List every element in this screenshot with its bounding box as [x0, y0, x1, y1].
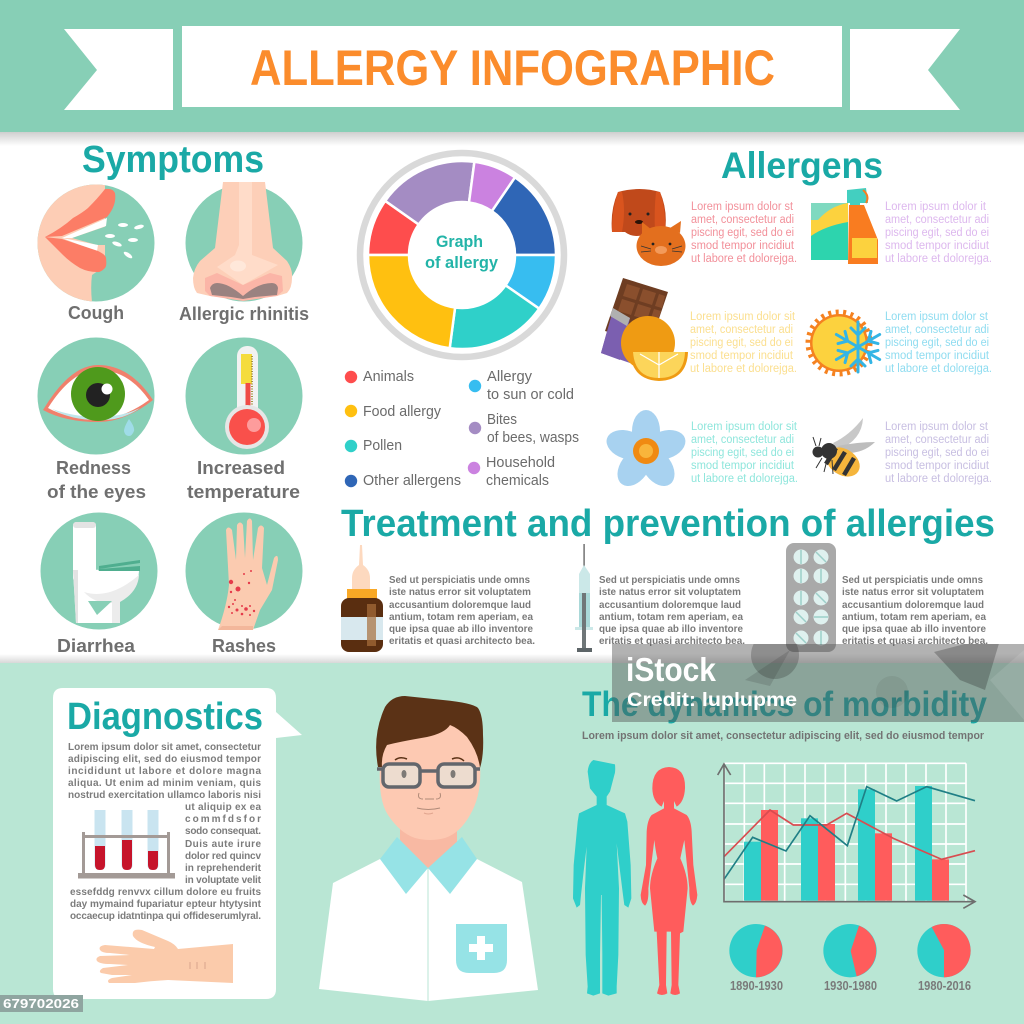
donut chart: graph of allergy [360, 153, 564, 357]
chart center label: Graph [436, 233, 483, 251]
text: animals: piscing egit, sed do ei [691, 227, 794, 239]
diagnostics paragraph: incididunt ut labore et dolore magna [68, 766, 261, 777]
text: sun or cold: smod tempor incidiut [885, 350, 990, 362]
heading: symptoms: Symptoms [82, 139, 264, 181]
text: treatment 2: accusantium doloremque laud [599, 599, 741, 611]
legend: Pollen [363, 438, 402, 454]
diagnostics paragraph: essefddg renvvx cillum dolore eu fruits [70, 887, 261, 898]
watermark overlay: Credit: luplupme [627, 690, 797, 711]
label: increased temperature: Increased [197, 457, 285, 478]
icon: flower [603, 410, 689, 492]
text: treatment 2: iste natus error sit voluptatem [599, 586, 741, 598]
face [380, 720, 480, 840]
text: pollen: Lorem ipsum dolor sit [691, 421, 798, 433]
diagnostics paragraph: in voluptate velit [185, 875, 262, 886]
text: bites: amet, consectetur adi [885, 434, 989, 446]
text: treatment 3: que ipsa quae ab illo inventore [842, 623, 986, 635]
text: sun or cold: Lorem ipsum dolor st [885, 311, 989, 323]
chart: morbidity bars and lines [718, 763, 975, 908]
chart center label [425, 233, 499, 272]
label: diarrhea: Diarrhea [57, 635, 136, 656]
banner [182, 26, 842, 107]
diagnostics paragraph: ut aliquip ex ea [185, 802, 261, 813]
legend: to sun or cold [487, 387, 574, 403]
icon: nose [186, 182, 302, 302]
text: food allergy: smod tempor incidiut [690, 350, 794, 362]
legend: Household [486, 455, 555, 471]
heading: the dynamics of morbidity: The dynamics of morbidity [582, 685, 987, 724]
icon: eye [38, 338, 154, 454]
glasses [377, 764, 480, 787]
icon: household chemicals [811, 188, 878, 264]
text: food allergy: amet, consectetur adi [690, 324, 793, 336]
icon: syringe [575, 544, 593, 652]
text: treatment 1: Sed ut perspiciatis unde omns [389, 574, 530, 586]
legend: Allergy [487, 369, 533, 385]
text: bites: piscing egit, sed do ei [885, 447, 989, 459]
hair [376, 696, 483, 768]
text: household chemicals: Lorem ipsum dolor it [885, 201, 987, 213]
text: treatment 1 [389, 574, 535, 647]
text: food allergy: ut labore et dolorejga. [690, 363, 797, 375]
text: sun or cold: amet, consectetur adi [885, 324, 989, 336]
label: redness of the eyes: Redness [56, 457, 131, 478]
text: treatment 3: Sed ut perspiciatis unde omns [842, 574, 983, 586]
icon: chocolate and orange [601, 278, 688, 381]
pie labels: 1980-2016 [918, 979, 971, 993]
text: treatment 3 [842, 574, 988, 647]
text: treatment 2: Sed ut perspiciatis unde omns [599, 574, 740, 586]
pie charts by period [729, 924, 971, 977]
legend: Bites [487, 412, 517, 428]
text: food allergy: Lorem ipsum dolor sit [690, 311, 796, 323]
text: treatment 1: eritatis et quasi architecto bea. [389, 635, 535, 647]
text: household chemicals: piscing egit, sed do ei [885, 227, 989, 239]
icon: arm with skin test [96, 930, 233, 983]
text: pollen: piscing egit, sed do ei [691, 447, 794, 459]
collar [380, 837, 428, 894]
text: food allergy: piscing egit, sed do ei [690, 337, 793, 349]
diagnostics paragraph: day mymaind fupariatur epteur htytysint [70, 899, 262, 910]
nose and mouth [417, 793, 440, 810]
image id tag [0, 995, 83, 1012]
legend: of bees, wasps [487, 430, 579, 446]
text: bites: Lorem ipsum dolor st [885, 421, 989, 433]
diagnostics paragraph: adipiscing elit, sed do eiusmod tempor [68, 754, 261, 765]
text: household chemicals [885, 201, 992, 265]
heading: treatment and prevention: Treatment and prevention of allergies [341, 503, 995, 545]
text: animals: smod tempor incidiut [691, 240, 795, 252]
text: animals: Lorem ipsum dolor st [691, 201, 794, 213]
text: treatment 2: antium, totam rem aperiam, ea [599, 611, 743, 623]
icon: toilet [40, 512, 158, 630]
label: increased temperature: temperature [187, 481, 300, 502]
diagnostics paragraph: occaecup idatntinpa qui offideserumlyral. [70, 911, 261, 922]
diagnostics paragraph: c o m m f d s f o r [185, 814, 261, 825]
icon: hand with rash [186, 512, 302, 630]
text: treatment 2: eritatis et quasi architecto bea. [599, 635, 745, 647]
label: rashes: Rashes [212, 635, 276, 656]
text: household chemicals: amet, consectetur adi [885, 214, 989, 226]
text: household chemicals: ut labore et dolorejga. [885, 253, 992, 265]
icon: thermometer [186, 338, 302, 454]
watermark text: iStock [626, 651, 717, 688]
watermark overlay [612, 644, 1024, 722]
text: treatment 3: eritatis et quasi architecto bea. [842, 635, 988, 647]
text: animals: ut labore et dolorejga. [691, 253, 797, 265]
doctor illustration [319, 696, 538, 1001]
text: treatment 3: antium, totam rem aperiam, ea [842, 611, 986, 623]
label: redness of the eyes: of the eyes [47, 481, 146, 502]
subheading: Lorem ipsum dolor sit amet, consectetur adipiscing elit, sed do eiusmod tempor [582, 730, 985, 742]
legend: chemicals [486, 473, 549, 489]
icon: dropper bottle [341, 545, 383, 652]
diagnostics paragraph: in reprehenderit [185, 863, 262, 874]
pie labels [730, 979, 971, 993]
text: treatment 1: antium, totam rem aperiam, ea [389, 611, 533, 623]
ribbon right [850, 29, 960, 110]
legend: Other allergens [363, 473, 461, 489]
pie labels: 1890-1930 [730, 979, 783, 993]
coat [319, 859, 538, 1001]
pocket [456, 924, 507, 973]
icon: bee [812, 418, 875, 483]
icon: pill blister [786, 543, 836, 652]
diagnostics paragraph: sodo consequat. [185, 826, 261, 837]
diagnostics paragraph: Lorem ipsum dolor sit amet, consectetur [68, 742, 261, 753]
icon: sun and snowflake [808, 312, 883, 374]
text: treatment 1: accusantium doloremque laud [389, 599, 531, 611]
chart center label: of allergy [425, 254, 499, 272]
text: pollen [691, 421, 798, 485]
text: bites: smod tempor incidiut [885, 460, 990, 472]
text: sun or cold: ut labore et dolorejga. [885, 363, 992, 375]
text: sun or cold [885, 311, 992, 375]
diagnostics paragraph [68, 742, 262, 922]
text: pollen: amet, consectetur adi [691, 434, 794, 446]
diagnostics paragraph: aliqua. Ut enim ad minim veniam, quis [68, 778, 261, 789]
text: treatment 2 [599, 574, 745, 647]
text: animals [691, 201, 797, 265]
text: household chemicals: smod tempor incidiut [885, 240, 990, 252]
text: treatment 3: iste natus error sit voluptatem [842, 586, 984, 598]
text: sun or cold: piscing egit, sed do ei [885, 337, 989, 349]
silhouettes: man and woman [573, 760, 697, 996]
legend: Animals [363, 369, 414, 385]
label: redness of the eyes [47, 457, 146, 502]
diagnostics paragraph: nostrud exercitation ullamco laboris nisi [68, 790, 261, 801]
panel: diagnostics speech bubble [53, 688, 302, 999]
icon: dog and cat [612, 189, 686, 266]
eyebrows [395, 758, 464, 761]
heading: diagnostics: Diagnostics [67, 696, 263, 738]
text: animals: amet, consectetur adi [691, 214, 794, 226]
diagnostics paragraph: Duis aute irure [185, 839, 261, 850]
title: ALLERGY INFOGRAPHIC [250, 40, 775, 96]
label: allergic rhinitis: Allergic rhinitis [179, 303, 309, 324]
text: bites: ut labore et dolorejga. [885, 473, 992, 485]
bottom panel background [0, 663, 1024, 1024]
text: pollen: ut labore et dolorejga. [691, 473, 798, 485]
icon: cough [38, 184, 154, 302]
ribbon left [64, 29, 173, 110]
label: increased temperature [187, 457, 300, 502]
header band [0, 0, 1024, 132]
diagnostics paragraph: dolor red quincv [185, 851, 261, 862]
text: bites [885, 421, 992, 485]
pie labels: 1930-1980 [824, 979, 877, 993]
text: treatment 2: que ipsa quae ab illo inventore [599, 623, 743, 635]
icon: test tubes [78, 810, 175, 878]
neck [400, 825, 457, 870]
text: food allergy [690, 311, 797, 375]
text: treatment 1: que ipsa quae ab illo inventore [389, 623, 533, 635]
text: treatment 3: accusantium doloremque laud [842, 599, 984, 611]
image id tag: 679702026 [3, 997, 79, 1011]
legend [345, 369, 579, 489]
heading: allergens: Allergens [721, 145, 883, 186]
text: treatment 1: iste natus error sit voluptatem [389, 586, 531, 598]
label: cough: Cough [68, 302, 124, 323]
text: pollen: smod tempor incidiut [691, 460, 795, 472]
legend: Food allergy [363, 404, 442, 420]
